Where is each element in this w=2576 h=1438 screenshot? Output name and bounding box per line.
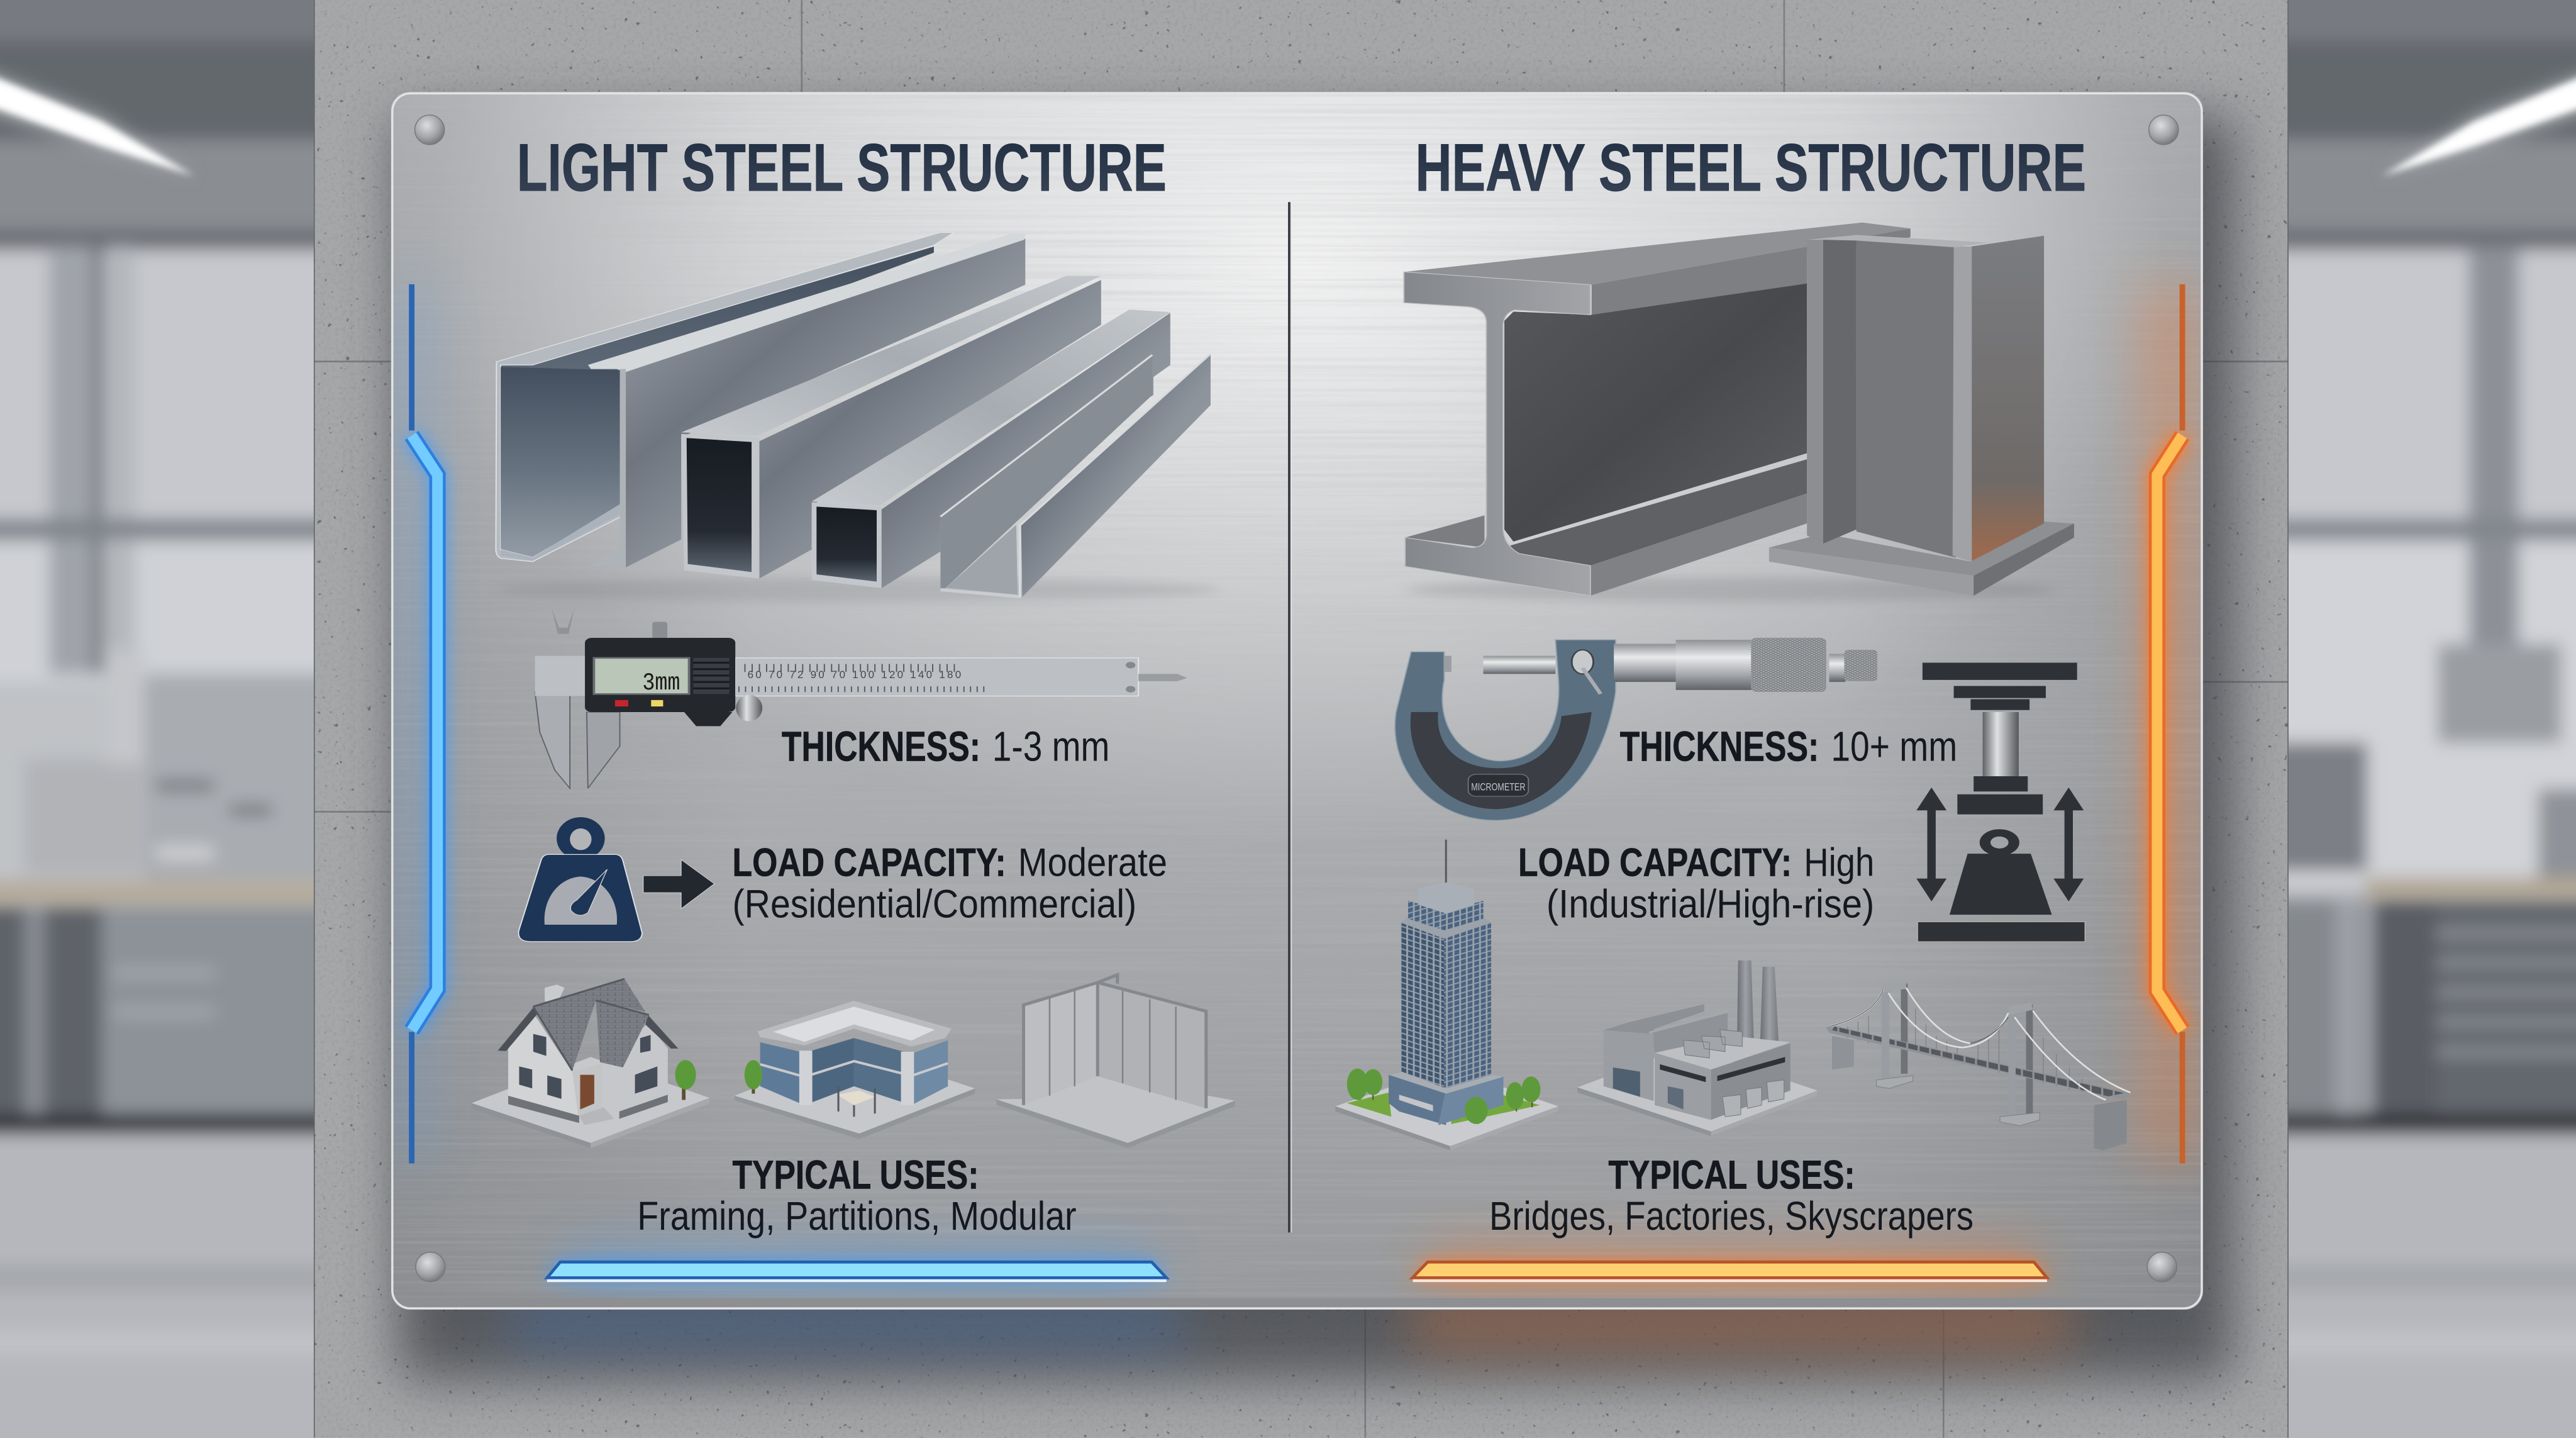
caliper labels: 3mm: [642, 669, 680, 697]
icon: press with weight and arrows: [1916, 662, 2085, 942]
load capacity text heavy: LOAD CAPACITY:: [1518, 840, 1792, 884]
load capacity text heavy: [1518, 840, 1874, 926]
blue neon side strip: [412, 284, 438, 1164]
load capacity text: (Residential/Commercial): [733, 882, 1136, 926]
load capacity text: Moderate: [1018, 840, 1167, 884]
rectangular tube: [681, 276, 1101, 579]
micrometer label: MICROMETER: [1471, 781, 1525, 793]
icon: commercial building: [735, 1001, 975, 1139]
thickness text heavy: THICKNESS:: [1620, 723, 1819, 770]
heavy I-beam and column: [1404, 223, 2074, 602]
concrete wall: [314, 0, 2289, 1438]
typical uses text: TYPICAL USES:: [733, 1152, 979, 1198]
caliper labels: [642, 669, 961, 697]
heavy title: HEAVY STEEL STRUCTURE: [1415, 130, 2086, 205]
blue neon bottom bar: [547, 1262, 1167, 1281]
icon: house: [472, 979, 709, 1148]
typical uses text heavy: TYPICAL USES:: [1608, 1152, 1855, 1198]
corner screws: [415, 115, 2179, 1282]
icon: micrometer: [1395, 638, 1877, 820]
C channel back: [496, 233, 953, 562]
light title: LIGHT STEEL STRUCTURE: [517, 130, 1167, 205]
load capacity text heavy: (Industrial/High-rise): [1546, 882, 1874, 926]
thickness text heavy: 10+ mm: [1831, 723, 1957, 770]
orange neon bottom bar: [1413, 1262, 2047, 1281]
typical uses text: Framing, Partitions, Modular: [637, 1193, 1077, 1239]
load capacity text: LOAD CAPACITY:: [733, 840, 1006, 884]
icon: partition walls: [996, 975, 1235, 1148]
icon: factory: [1577, 961, 1818, 1136]
icon: digital caliper: [535, 609, 1187, 788]
typical uses text heavy: Bridges, Factories, Skyscrapers: [1489, 1193, 1974, 1239]
H column: [1769, 235, 2074, 596]
steel plate: [391, 92, 2203, 1310]
caliper labels: 60 70 72 90 70 100 120 140 180: [748, 669, 961, 681]
background: blurred factory right: [2238, 0, 2576, 1438]
load capacity text heavy: High: [1804, 840, 1874, 884]
C channel front: [588, 233, 1026, 567]
panel: light steel structure: [412, 130, 1235, 1281]
thickness text: THICKNESS:: [782, 723, 980, 770]
typical uses text: [637, 1152, 1077, 1239]
typical uses text heavy: [1489, 1152, 1974, 1239]
background: blurred factory left: [0, 0, 365, 1438]
icon: weight with gauge and arrow: [519, 817, 714, 942]
panel: heavy steel structure: [1335, 130, 2182, 1281]
orange neon side strip: [2157, 284, 2182, 1164]
thickness text: 1-3 mm: [992, 723, 1109, 770]
center divider: [1288, 202, 1292, 1232]
I-beam: [1404, 223, 1911, 596]
light steel profiles: [496, 233, 1219, 602]
U channel: [940, 354, 1211, 597]
square tube: [812, 309, 1170, 588]
icon: suspension bridge: [1826, 982, 2130, 1151]
load capacity text: [733, 840, 1167, 926]
icon: skyscraper: [1335, 840, 1558, 1151]
